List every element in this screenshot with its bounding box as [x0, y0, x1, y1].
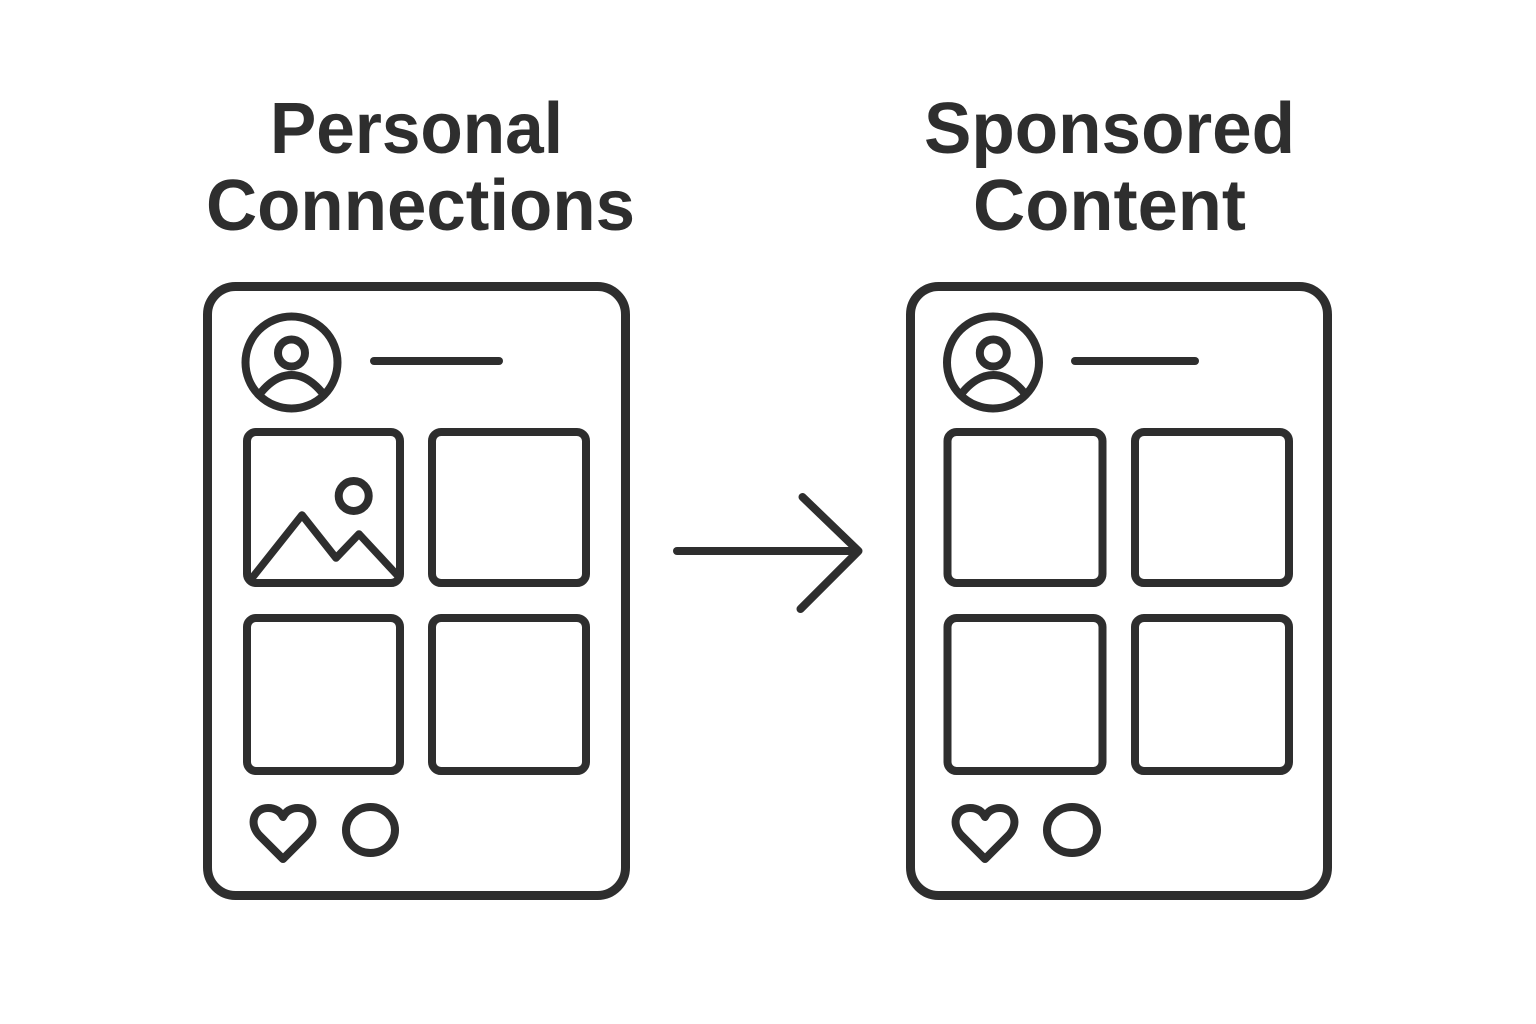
panel: sponsored feed phone — [910, 286, 1328, 896]
heading: Sponsored Content — [924, 89, 1295, 246]
icon: heart — [254, 808, 312, 859]
empty tile top right — [1135, 432, 1289, 583]
icon: user avatar — [947, 316, 1039, 408]
phone frame — [910, 286, 1328, 896]
empty tile top right — [432, 432, 586, 583]
icon: comment circle — [1047, 807, 1097, 853]
empty tile bottom right — [432, 618, 586, 771]
icon: comment circle — [346, 807, 395, 853]
heading: Personal Connections — [206, 89, 635, 246]
empty tile top left — [948, 432, 1102, 583]
empty tile bottom left — [948, 618, 1102, 771]
arrow — [677, 497, 858, 609]
username line — [374, 357, 499, 365]
icon: user avatar — [246, 316, 338, 408]
icon: heart — [956, 808, 1014, 859]
image tile with mountain picture — [247, 432, 400, 583]
heading: Personal Connections: Personal — [270, 89, 563, 169]
phone frame — [208, 286, 626, 896]
heading: Personal Connections: Connections — [206, 166, 635, 246]
empty tile bottom right — [1135, 618, 1289, 771]
heading: Sponsored Content: Sponsored — [924, 89, 1295, 169]
username line — [1075, 357, 1195, 365]
heading: Sponsored Content: Content — [973, 166, 1246, 246]
empty tile bottom left — [247, 618, 400, 771]
panel: personal feed phone — [208, 286, 626, 896]
